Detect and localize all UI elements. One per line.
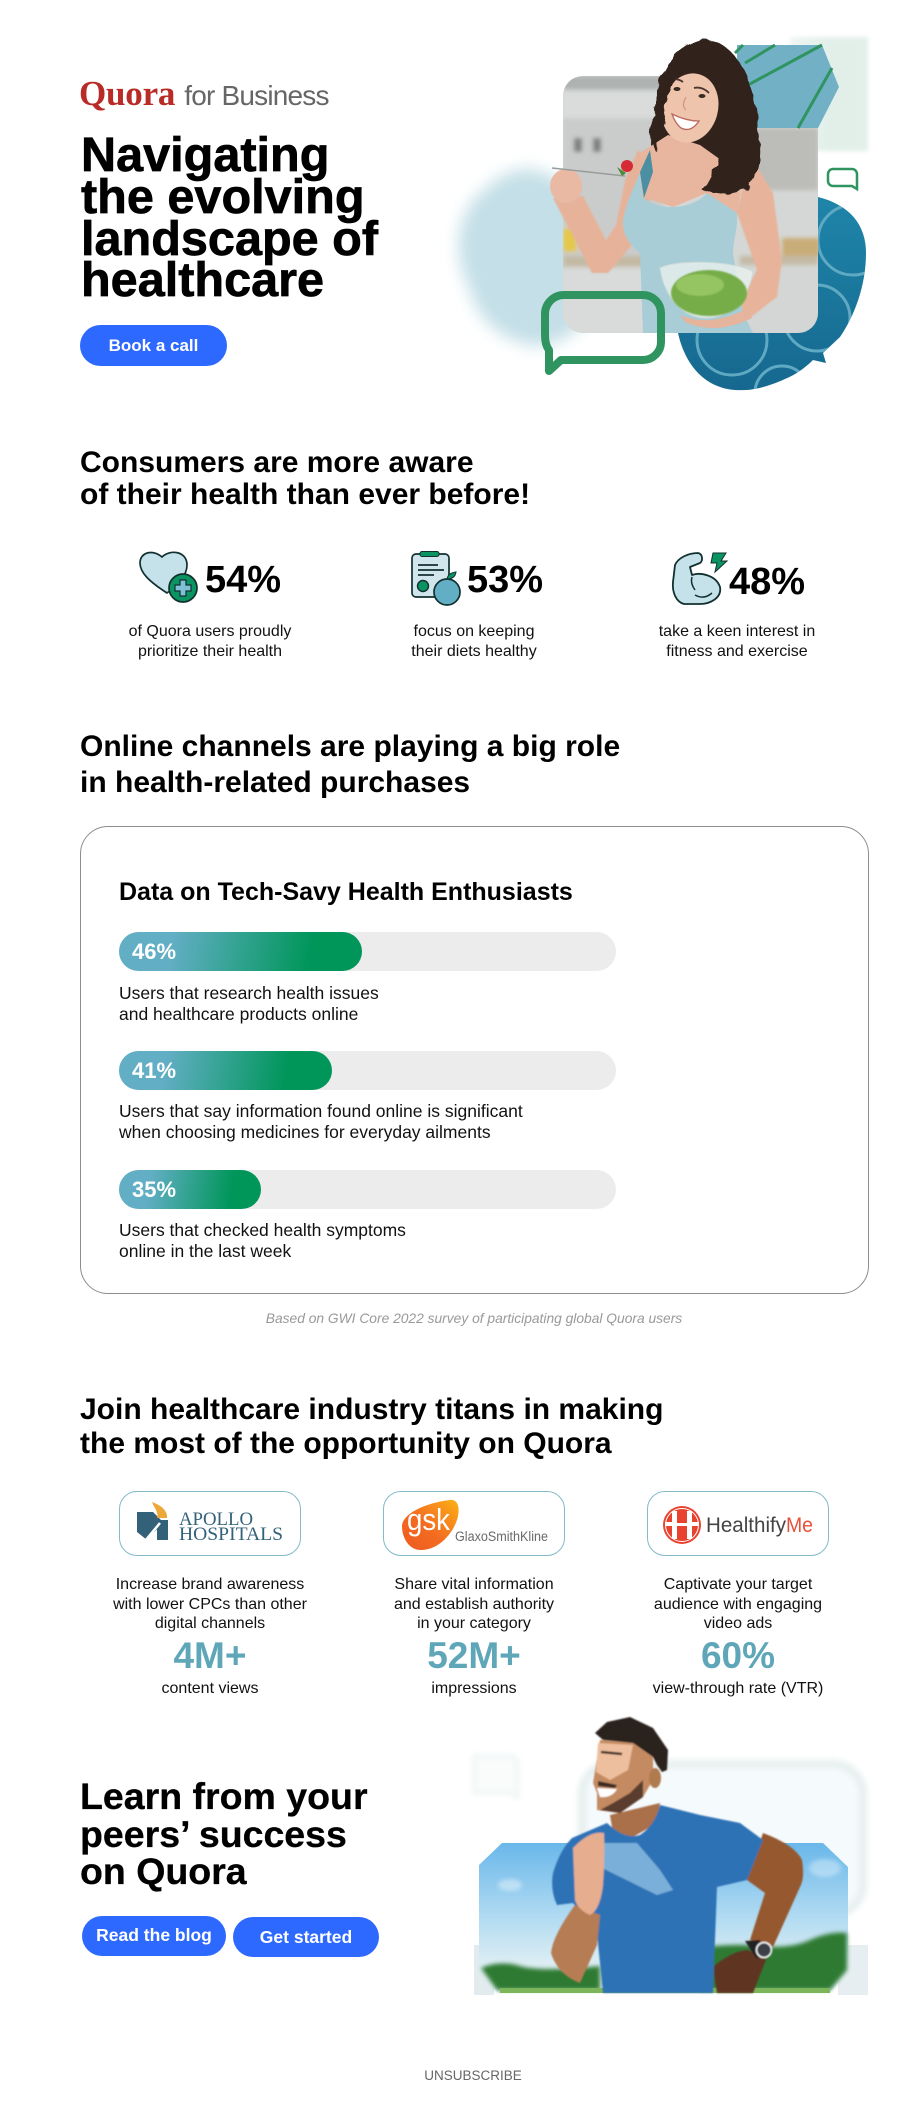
title: healthcare: [81, 253, 324, 307]
button: Book a call: [80, 325, 227, 366]
title: Navigating: [81, 128, 329, 182]
card title: Data on Tech-Savy Health Enthusiasts: [119, 878, 573, 906]
metric: 4M+: [173, 1635, 246, 1676]
caption: [411, 623, 537, 660]
heading: join titans: the most of the opportunity on Quora: [80, 1426, 612, 1460]
description: and establish authority: [394, 1596, 554, 1612]
metric label: content views: [162, 1680, 258, 1697]
button: Get started: Get started: [260, 1927, 352, 1947]
description: [394, 1576, 554, 1632]
closing heading: peers’ success: [80, 1812, 347, 1854]
dark blue speech blob: [678, 197, 866, 390]
chest and neck: [640, 135, 742, 215]
bar label 3: Users that checked health symptoms: [119, 1220, 406, 1240]
neck: [610, 1803, 660, 1837]
heading: join titans: Join healthcare industry titans in making: [80, 1393, 663, 1426]
description: with lower CPCs than other: [113, 1596, 307, 1612]
salad bowl: [660, 262, 753, 328]
case study: Apollo Hospitals: [113, 1491, 307, 1697]
case study: GSK: [383, 1491, 565, 1697]
bar label 3: online in the last week: [119, 1241, 291, 1261]
left arm with hand: [550, 150, 655, 273]
pale blocks: [474, 1945, 868, 1995]
sky and trees panel: [479, 1843, 848, 1993]
logo card: Apollo: APOLLO: [178, 1508, 252, 1530]
shirt: [552, 1805, 763, 1993]
illustration: woman eating salad: [451, 36, 869, 390]
raised forearm: [551, 1905, 600, 1983]
button: Get started: [233, 1917, 379, 1957]
logo card: GSK: gsk: [406, 1502, 450, 1536]
logo card: HealthifyMe: [647, 1491, 829, 1556]
description: [654, 1576, 822, 1632]
raised hand: [573, 1833, 604, 1915]
fork: [552, 168, 625, 176]
kitchen photo background: [563, 76, 820, 333]
hair: [595, 1717, 668, 1772]
hair over shoulder: [702, 95, 760, 195]
metric: 60%: [701, 1635, 775, 1676]
bar: 41%: [119, 1051, 616, 1090]
stat: 54%: [129, 552, 292, 660]
description: digital channels: [155, 1615, 265, 1632]
unsubscribe link: UNSUBSCRIBE: [424, 2068, 522, 2083]
bar label 1: Users that research health issues: [119, 983, 379, 1003]
stat: 53%: [411, 551, 543, 660]
far arm: [747, 1833, 803, 1947]
heading: online channels: Online channels are playing a big role: [80, 730, 620, 763]
woman: [550, 39, 782, 333]
heading: online channels: in health-related purchases: [80, 766, 470, 799]
heading: consumers: [80, 446, 530, 511]
caption: focus on keeping: [414, 623, 534, 640]
description: video ads: [704, 1615, 772, 1632]
description: Share vital information: [394, 1576, 554, 1593]
bar: 41%: 41%: [132, 1058, 176, 1083]
bar: 35%: [119, 1170, 616, 1209]
bar label 2: when choosing medicines for everyday ailments: [119, 1122, 491, 1142]
description: in your category: [417, 1615, 531, 1632]
description: audience with engaging: [654, 1596, 822, 1612]
shirt highlight: [600, 1843, 673, 1895]
bar label 1: [119, 983, 379, 1024]
pale bubble outlines: [474, 1756, 863, 1914]
large green speech bubble: [545, 295, 661, 371]
bar: 46%: 46%: [132, 939, 176, 964]
icon: heart with plus: [139, 552, 198, 603]
watch: [745, 1940, 772, 1958]
caption: of Quora users proudly: [129, 623, 291, 640]
value: 48%: [729, 561, 805, 603]
logo card: Apollo: [119, 1491, 301, 1556]
logo card: HealthifyMe: Healthify: [706, 1514, 786, 1536]
heading: consumers: Consumers are more aware: [80, 446, 474, 479]
description: Increase brand awareness: [116, 1576, 304, 1593]
hair strand left: [651, 46, 703, 150]
logo card: GSK: [383, 1491, 565, 1556]
footnote: Based on GWI Core 2022 survey of participating global Quora users: [266, 1311, 682, 1326]
bar: 46%: [119, 932, 616, 971]
case study: HealthifyMe: [647, 1491, 829, 1697]
heading: join titans: [80, 1393, 663, 1460]
logo: Quora for Business: Quora for Business: [79, 74, 329, 113]
button: Book a call: Book a call: [109, 336, 198, 355]
value: 54%: [205, 559, 281, 601]
caption: [659, 623, 815, 660]
bar label 3: [119, 1220, 406, 1261]
button: Read the blog: [82, 1916, 226, 1956]
face: [654, 67, 726, 149]
logo card: Apollo: HOSPITALS: [178, 1524, 282, 1544]
hexagon with green lines: [735, 45, 839, 128]
hair back: [650, 39, 760, 195]
runner: [551, 1717, 803, 1993]
metric: 52M+: [427, 1635, 521, 1676]
description: [113, 1576, 307, 1632]
bar label 1: and healthcare products online: [119, 1004, 358, 1024]
bar: 35%: 35%: [132, 1177, 176, 1202]
caption: take a keen interest in: [659, 623, 815, 640]
icon: clipboard with apple: [411, 551, 461, 606]
right arm: [737, 167, 782, 320]
panel: data card: [80, 826, 869, 1294]
title: the evolving: [81, 170, 365, 224]
radish: [617, 160, 633, 176]
caption: their diets healthy: [411, 643, 537, 660]
small speech bubble: [828, 169, 857, 189]
illustration: runner: [474, 1716, 868, 1995]
pale green block: [790, 37, 868, 151]
title: landscape of: [81, 212, 378, 266]
tank top: [623, 172, 753, 333]
title: [81, 128, 378, 307]
heading: online channels: [80, 730, 620, 799]
value: 53%: [467, 559, 543, 601]
closing heading: [80, 1775, 368, 1892]
metric label: impressions: [431, 1680, 517, 1697]
metric label: view-through rate (VTR): [653, 1680, 823, 1697]
closing heading: Learn from your: [80, 1775, 368, 1817]
stat: 48%: [659, 552, 815, 660]
button: Read the blog: Read the blog: [96, 1925, 212, 1945]
caption: prioritize their health: [138, 643, 282, 660]
head: [593, 1740, 661, 1813]
strap: [640, 150, 653, 198]
logo card: GSK: GlaxoSmithKline: [454, 1528, 548, 1544]
heading: consumers: of their health than ever before!: [80, 478, 530, 511]
pale blue blob: [459, 169, 600, 346]
bar label 2: [119, 1101, 523, 1142]
closing heading: on Quora: [80, 1850, 247, 1892]
logo card: HealthifyMe: Me: [786, 1514, 812, 1536]
hand on hip: [713, 1950, 767, 1993]
bar label 2: Users that say information found online is significant: [119, 1101, 523, 1121]
icon: flexed arm with bolt: [672, 552, 728, 605]
description: Captivate your target: [664, 1576, 812, 1593]
caption: fitness and exercise: [666, 643, 808, 660]
caption: [129, 623, 292, 660]
